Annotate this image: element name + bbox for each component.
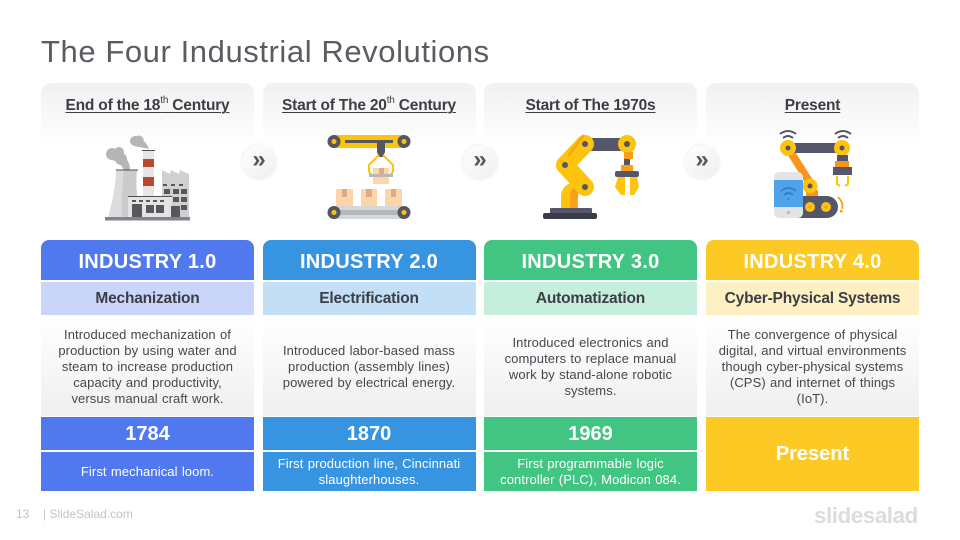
title: The Four Industrial Revolutions [41, 34, 490, 69]
year: 1969 [568, 423, 613, 445]
subheading: Electrification [319, 290, 419, 306]
present block [706, 417, 919, 491]
heading: start of the 1970s: Start of The 1970s [526, 97, 655, 114]
icon: smart robot arm with phone [774, 130, 852, 218]
icon: assembly line [328, 135, 410, 219]
milestone: First mechanical loom. [81, 464, 214, 478]
header: INDUSTRY 4.0 [743, 250, 882, 272]
icon: factory [105, 136, 190, 220]
description: powered by electrical energy. [283, 375, 455, 390]
arrow 1: » [252, 146, 266, 173]
year [262, 417, 476, 450]
description [706, 316, 919, 416]
milestone: First programmable logic [517, 456, 664, 470]
description: work by stand-alone robotic [509, 367, 672, 382]
description: computers to replace manual [505, 351, 676, 366]
milestone [484, 452, 697, 491]
arrow 3: » [695, 146, 709, 173]
description [262, 316, 476, 416]
panel: Industry 1.0 [41, 240, 254, 491]
arrow 2: » [473, 146, 487, 173]
panel: era header 1 [41, 83, 254, 147]
subheading [484, 282, 697, 315]
panel: Industry 3.0 [484, 240, 697, 491]
panel: era header 4 [706, 83, 919, 147]
description: production (assembly lines) [288, 359, 450, 374]
description: Introduced electronics and [512, 335, 669, 350]
milestone: slaughterhouses. [319, 472, 419, 486]
subheading [41, 282, 254, 315]
header: INDUSTRY 2.0 [300, 250, 438, 272]
header: INDUSTRY 3.0 [521, 250, 660, 272]
page number: 13 [16, 507, 29, 521]
heading: end of the 18th century: End of the 18th Century [66, 95, 229, 114]
heading: present: Present [785, 97, 840, 114]
header [484, 240, 697, 280]
description: The convergence of physical [728, 327, 897, 342]
description: capacity and productivity, [73, 375, 222, 390]
subheading: Cyber-Physical Systems [725, 290, 900, 306]
year: 1870 [347, 423, 391, 445]
arrow 1 [242, 145, 276, 179]
header [262, 240, 476, 280]
description [41, 316, 254, 416]
panel: era header 2 [262, 83, 476, 147]
subheading [262, 282, 476, 315]
icon: robotic arm [543, 134, 639, 219]
subheading: Automatization [536, 290, 645, 306]
header [41, 240, 254, 280]
arrow 3 [685, 145, 719, 179]
description: production by using water and [58, 343, 237, 358]
header: INDUSTRY 1.0 [78, 250, 217, 272]
header [706, 240, 919, 280]
year [41, 417, 254, 450]
footer source: | SlideSalad.com [43, 507, 133, 521]
panel: era header 3 [484, 83, 697, 147]
year: 1784 [125, 423, 170, 445]
description: Introduced labor-based mass [283, 343, 455, 358]
subheading: Mechanization [95, 290, 200, 306]
description: though cyber-physical systems [722, 359, 903, 374]
description: Introduced mechanization of [64, 327, 231, 342]
description: digital, and virtual environments [719, 343, 906, 358]
description: steam to increase production [62, 359, 233, 374]
description: (CPS) and internet of things [730, 375, 895, 390]
panel: Industry 2.0 [263, 240, 476, 491]
panel: Industry 4.0 [706, 240, 919, 491]
logo: slidesalad [814, 503, 918, 528]
milestone: controller (PLC), Modicon 084. [500, 472, 681, 486]
subheading [706, 282, 919, 315]
heading: start of the 20th century: Start of The 20th Century [282, 95, 456, 114]
milestone [41, 452, 254, 491]
milestone [262, 452, 476, 491]
description: versus manual craft work. [71, 391, 224, 406]
description: systems. [564, 383, 617, 398]
year [484, 417, 697, 450]
present block: Present [776, 442, 849, 464]
description: (IoT). [797, 391, 828, 406]
milestone: First production line, Cincinnati [278, 456, 460, 470]
description [484, 316, 697, 416]
arrow 2 [463, 145, 497, 179]
